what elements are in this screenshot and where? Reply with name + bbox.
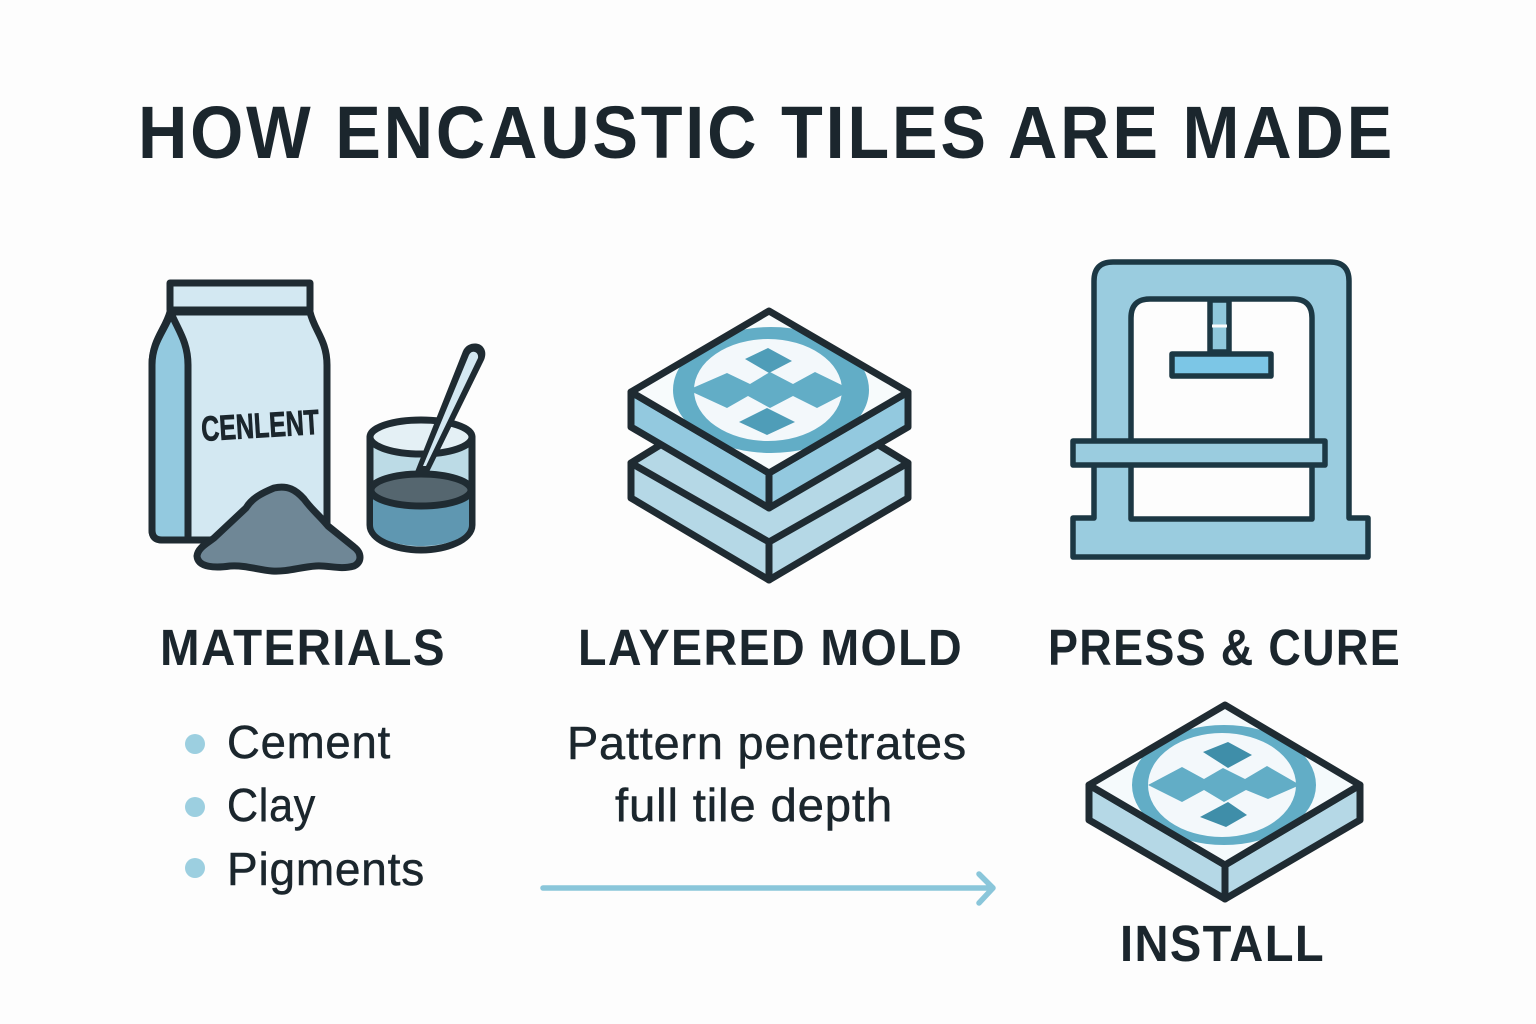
arrow: to install bbox=[543, 874, 993, 903]
icon: powder pile bbox=[197, 487, 360, 571]
heading: layered mold: LAYERED MOLD bbox=[578, 619, 963, 676]
list: materials: Pigments bbox=[227, 843, 425, 895]
icon: layered mold bbox=[631, 311, 908, 580]
list: materials bbox=[185, 716, 425, 895]
pattern: tile motif bbox=[1132, 725, 1316, 845]
list: materials: Clay bbox=[227, 779, 316, 831]
pattern: tile motif bbox=[673, 327, 869, 453]
title: HOW ENCAUSTIC TILES ARE MADE bbox=[138, 91, 1395, 174]
icon: finished tile bbox=[1089, 705, 1360, 899]
caption: pattern depth: Pattern penetrates bbox=[567, 717, 967, 769]
heading: press and cure: PRESS & CURE bbox=[1048, 619, 1401, 676]
icon: hydraulic press bbox=[1073, 262, 1368, 557]
panel: install bbox=[1089, 705, 1360, 972]
panel: layered mold bbox=[543, 311, 993, 903]
panel: press and cure bbox=[1048, 262, 1401, 676]
icon: cement bag bbox=[152, 283, 327, 540]
caption: pattern depth bbox=[567, 717, 967, 831]
panel: materials bbox=[152, 283, 485, 895]
icon: cement bag: CENLENT bbox=[200, 403, 320, 449]
caption: pattern depth: full tile depth bbox=[615, 779, 893, 831]
list: materials: Cement bbox=[227, 716, 391, 768]
heading: install: INSTALL bbox=[1120, 915, 1325, 972]
icon: mixing cup bbox=[370, 343, 485, 550]
heading: materials: MATERIALS bbox=[160, 619, 446, 676]
